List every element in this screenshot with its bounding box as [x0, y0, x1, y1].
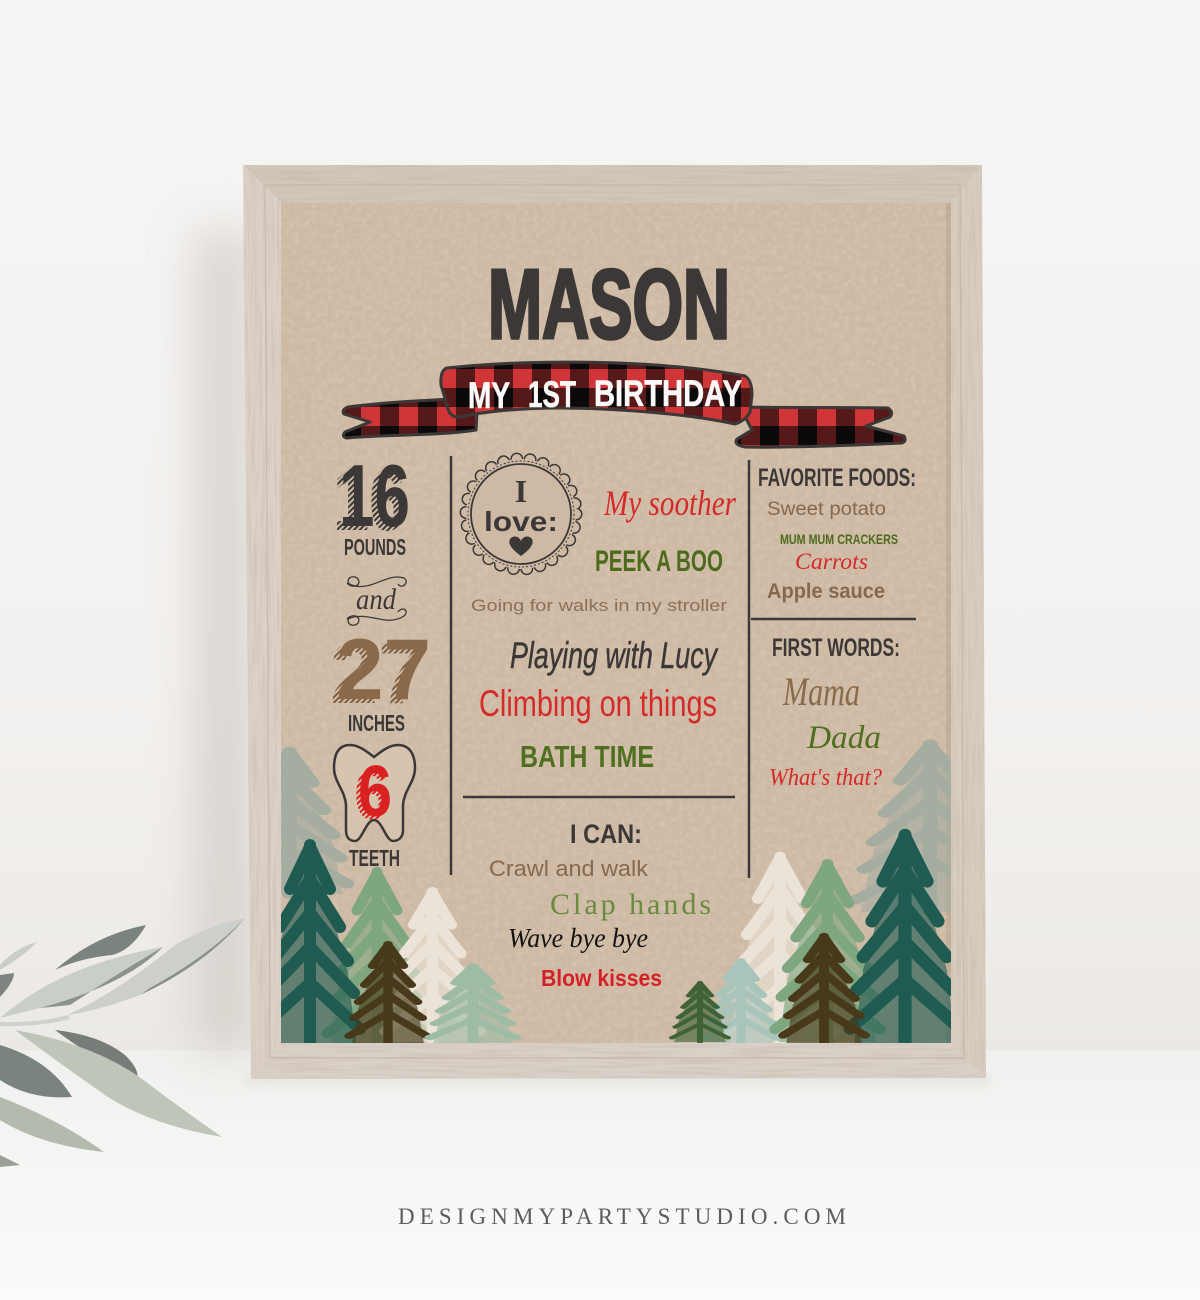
word: dada: Dada: [806, 720, 881, 756]
item: blow kisses: Blow kisses: [541, 965, 662, 991]
item: my soother: My soother: [603, 483, 737, 523]
stamp badge: I: [515, 473, 527, 509]
column dividers: [451, 456, 916, 878]
leaf: top long light: [68, 918, 245, 1015]
and flourish: [347, 577, 406, 625]
favorite foods heading: FAVORITE FOODS:: [758, 464, 916, 492]
i can heading: I CAN:: [570, 819, 642, 849]
tree: medium green: [327, 872, 427, 1046]
banner text: [468, 373, 742, 416]
teeth label: TEETH: [349, 845, 400, 871]
tree: pale teal: [705, 961, 777, 1044]
stamp badge: [466, 459, 576, 569]
tree: cream: [385, 892, 480, 1042]
stats column: [330, 446, 431, 871]
weight number: 16: [333, 450, 405, 549]
leaf: left upper: [0, 942, 37, 970]
tree: gray left: [281, 746, 354, 899]
and flourish: and: [356, 583, 397, 616]
item: playing with lucy: Playing with Lucy: [510, 635, 719, 676]
food: sweet potato: Sweet potato: [767, 499, 886, 520]
kraft paper art panel: [281, 203, 951, 1043]
banner text: BIRTHDAY: [594, 373, 742, 414]
word: mama: Mama: [782, 669, 860, 714]
frame shadow on wall: [195, 230, 255, 1050]
weight number: 16: [339, 446, 410, 545]
tree: gray right: [851, 740, 951, 916]
tree: pale green: [430, 966, 516, 1043]
frame bottom bar: [251, 1041, 986, 1079]
food: apple sauce: Apple sauce: [767, 580, 885, 603]
banner centre: [441, 362, 752, 424]
teeth number: 6: [358, 752, 392, 832]
tree: cream right: [724, 852, 819, 1043]
banner left tail: [343, 398, 478, 438]
favorite foods section: [758, 464, 916, 603]
inches label: INCHES: [348, 710, 405, 736]
banner right tail: [736, 407, 905, 447]
forest: left trees: [281, 746, 522, 1043]
leaf: stem: [0, 1015, 70, 1026]
teeth number: 6: [354, 755, 390, 835]
leaf: dark left lower: [0, 1045, 72, 1097]
tree: dark teal right: [850, 835, 960, 1043]
leaf: dark left: [0, 973, 14, 997]
olive branch: [0, 918, 245, 1167]
shelf surface: [0, 1050, 1200, 1300]
studio watermark: DESIGNMYPARTYSTUDIO.COM: [398, 1204, 846, 1229]
pounds label: POUNDS: [344, 534, 406, 560]
first words heading: FIRST WORDS:: [772, 634, 900, 662]
tree: brown: [349, 944, 427, 1043]
picture frame: [243, 165, 986, 1079]
frame right bar: [951, 165, 986, 1078]
stamp badge: love:: [484, 506, 558, 537]
food: carrots: Carrots: [795, 549, 868, 574]
banner: plaid ribbon: [343, 362, 905, 447]
banner text: MY: [468, 375, 510, 416]
leaf: long upper light: [0, 947, 163, 1018]
tree: brown right: [783, 936, 865, 1043]
item: crawl and walk: Crawl and walk: [489, 856, 649, 881]
tree: dark teal: [281, 839, 366, 1043]
tree: medium green right: [775, 864, 880, 1042]
centre column: I love: [466, 459, 737, 774]
height number: 27: [336, 622, 431, 718]
leaf: dark lower: [55, 1030, 138, 1079]
forest: right trees: [668, 740, 951, 1043]
I can section: [489, 819, 711, 991]
item: bath time: BATH TIME: [520, 739, 654, 774]
icon: tooth: [334, 745, 415, 841]
leaf: dark upper: [55, 925, 146, 970]
item: going for walks: Going for walks in my stroller: [471, 596, 727, 615]
height number: 27: [330, 626, 426, 722]
name title: MASON: [488, 249, 730, 359]
frame top bar: [243, 165, 982, 203]
tree: small dark green: [672, 983, 728, 1042]
item: clap hands: Clap hands: [550, 888, 711, 921]
word: what's that: What's that?: [769, 765, 882, 791]
item: climbing on things: Climbing on things: [479, 683, 717, 724]
first words section: [769, 634, 900, 791]
item: peek a boo: PEEK A BOO: [595, 545, 723, 578]
frame shadow on shelf: [245, 1076, 990, 1084]
item: wave bye bye: Wave bye bye: [508, 923, 648, 953]
frame left bar: [243, 165, 281, 1079]
leaf: long lower: [15, 1030, 222, 1137]
leaf: bottom small: [0, 1155, 20, 1167]
food: mum mum crackers: MUM MUM CRACKERS: [780, 531, 898, 547]
leaf: bottom light: [0, 1097, 104, 1152]
banner text: 1ST: [528, 374, 576, 415]
